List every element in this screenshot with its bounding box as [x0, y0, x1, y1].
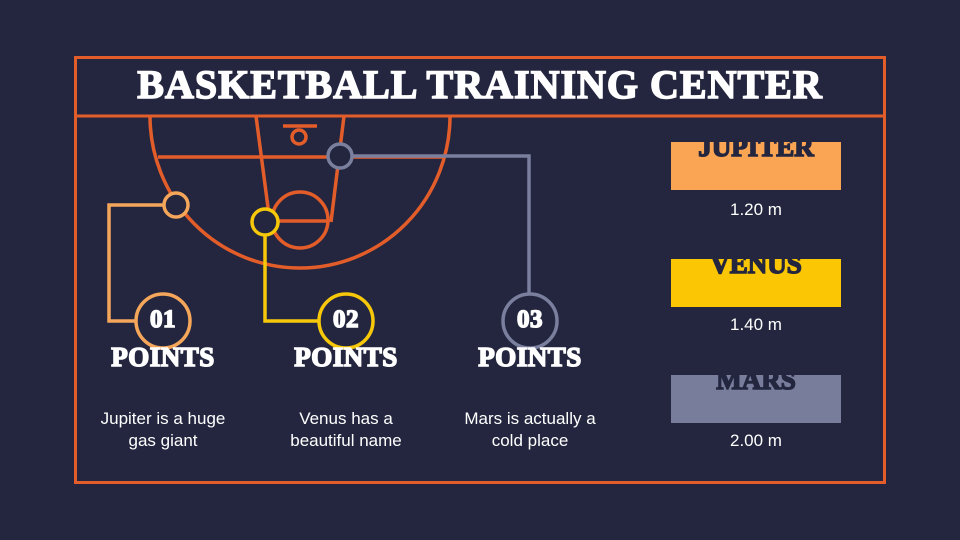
- bar mars: [671, 375, 841, 423]
- numbers: 01: [150, 306, 176, 333]
- text: 02: [333, 306, 359, 333]
- connector 3: [328, 144, 557, 348]
- connector 1: [109, 193, 190, 348]
- text: 2.00 m: [730, 431, 782, 450]
- text: POINTS: [478, 342, 582, 372]
- text: Mars is actually a cold place: [464, 409, 596, 450]
- connector 2: [252, 209, 373, 348]
- descriptions: Jupiter is a huge gas giant: [101, 409, 225, 450]
- bar jupiter: [671, 142, 841, 190]
- text: Venus has a beautiful name: [290, 409, 402, 450]
- title: BASKETBALL TRAINING CENTER: [137, 62, 823, 107]
- text: 1.40 m: [730, 315, 782, 334]
- bar venus: [671, 259, 841, 307]
- frame: [74, 56, 886, 484]
- text: 1.20 m: [730, 200, 782, 219]
- text: POINTS: [294, 342, 398, 372]
- text: 03: [517, 306, 543, 333]
- points labels: POINTS: [111, 342, 215, 372]
